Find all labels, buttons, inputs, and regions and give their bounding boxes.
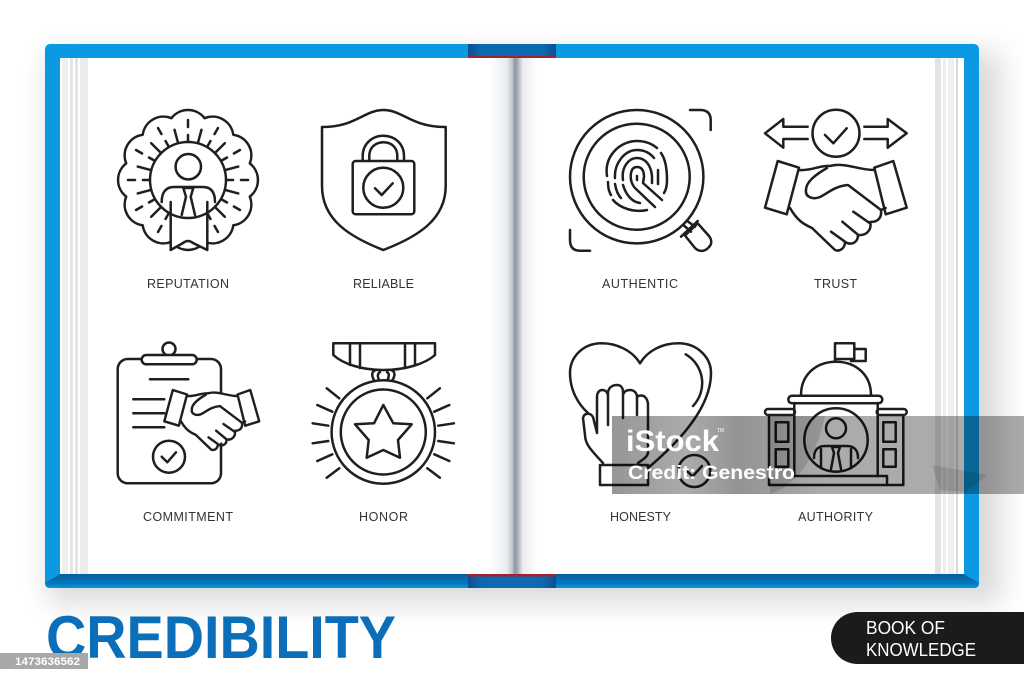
- icon: authentic fingerprint magnifier: [570, 110, 711, 251]
- book cover: [45, 44, 979, 588]
- icon: authority building: [765, 343, 907, 485]
- book: open book cover and pages: [45, 44, 979, 588]
- pages: [60, 58, 964, 574]
- label: commitment: COMMITMENT: [143, 510, 233, 524]
- label: authentic: AUTHENTIC: [602, 277, 678, 291]
- spine top tab: [468, 44, 556, 58]
- title: CREDIBILITY: [46, 604, 396, 671]
- watermark band: [612, 416, 1024, 494]
- watermark band: TM: [717, 428, 724, 434]
- icon: reputation rosette: [118, 110, 258, 250]
- cover bottom edge: [45, 574, 979, 588]
- left page edge stripes: [62, 58, 88, 574]
- label: honesty: HONESTY: [610, 510, 672, 524]
- label: reputation: REPUTATION: [147, 277, 229, 291]
- watermark band: iStock: [626, 425, 719, 458]
- icon: reliable shield with lock: [322, 110, 446, 250]
- badge: book of knowledge: KNOWLEDGE: [866, 640, 976, 660]
- label: honor: HONOR: [359, 510, 408, 524]
- icon: trust handshake with arrows: [765, 110, 907, 251]
- image id stamp: [0, 653, 88, 669]
- label: reliable: RELIABLE: [353, 277, 414, 291]
- icon: honor medal with star: [313, 343, 454, 484]
- spine bottom tab: [468, 574, 556, 588]
- image id stamp: 1473636562: [15, 656, 80, 668]
- book shadow: [48, 52, 1002, 604]
- badge: book of knowledge: [831, 612, 1024, 664]
- label: authority: AUTHORITY: [798, 510, 874, 524]
- badge: book of knowledge: BOOK OF: [866, 618, 945, 638]
- central gutter: [490, 58, 538, 574]
- icon: honesty heart and hand: [570, 343, 711, 487]
- watermark band: Credit: Genestro: [628, 463, 795, 484]
- icon: commitment clipboard with handshake: [118, 342, 259, 483]
- label: trust: TRUST: [814, 277, 857, 291]
- right page edge stripes: [935, 58, 958, 574]
